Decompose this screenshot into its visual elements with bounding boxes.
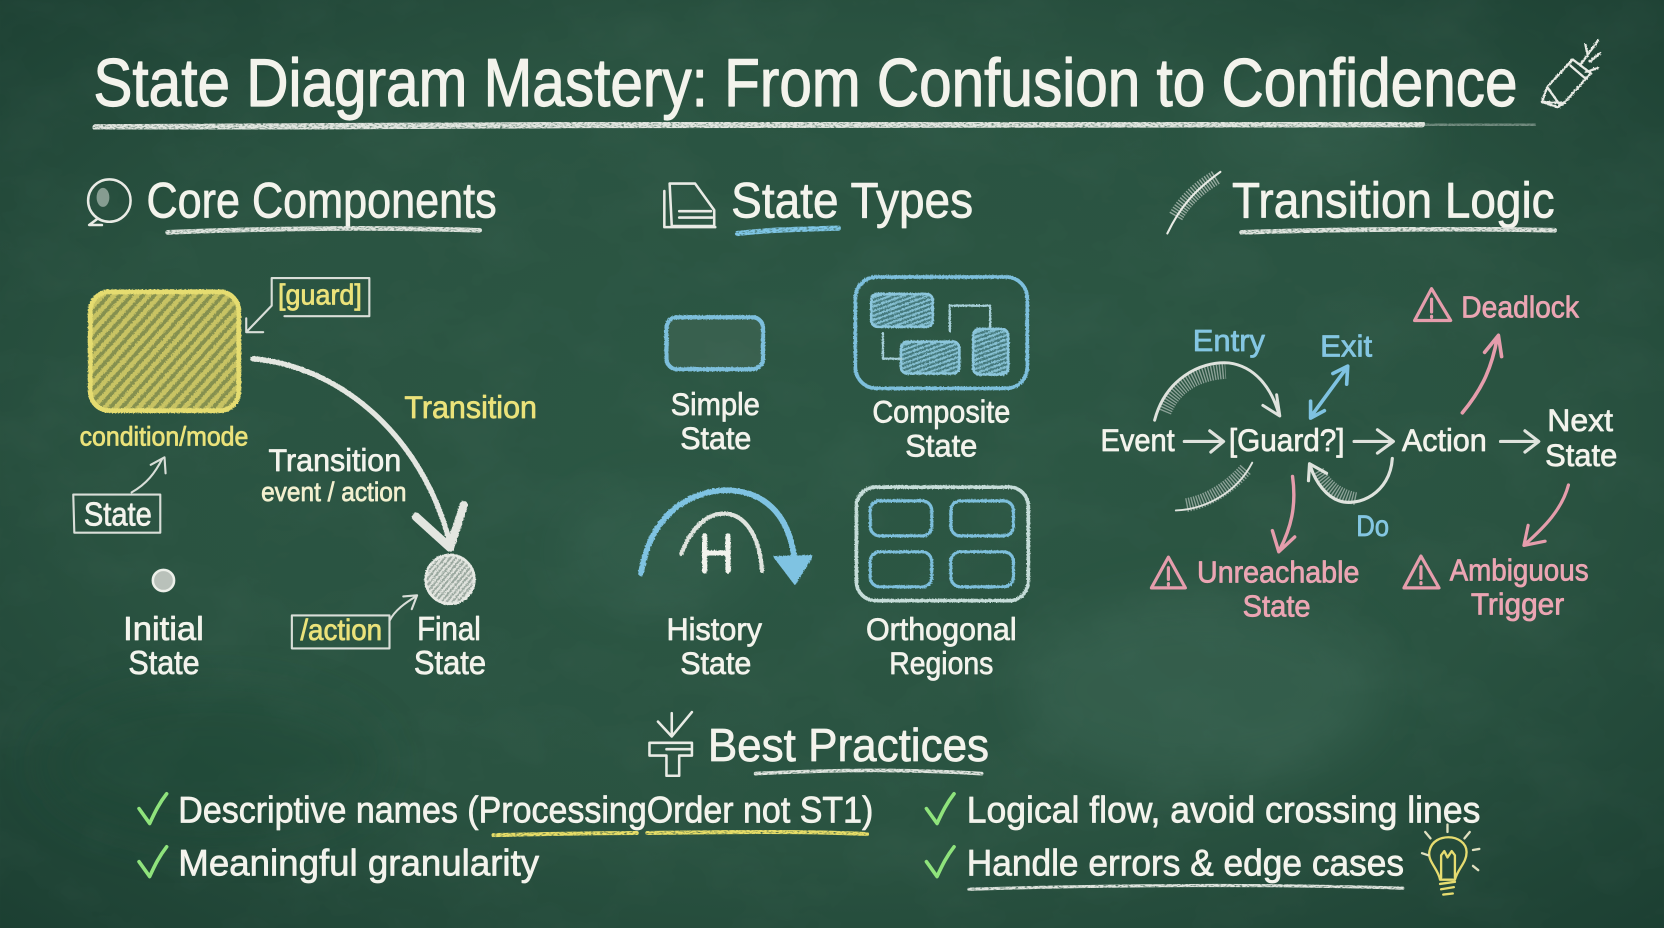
heading: best practices bbox=[649, 712, 989, 776]
do loop with feather bbox=[1308, 458, 1392, 543]
callout: guard bbox=[246, 278, 369, 332]
warning: ambiguous trigger: Trigger bbox=[1471, 586, 1564, 621]
flow: event guard action next state: [Guard?] bbox=[1229, 422, 1345, 458]
item: descriptive names: Descriptive names (ProcessingOrder not ST1) bbox=[178, 788, 873, 830]
label: transition event / action bbox=[261, 442, 406, 507]
exit arrow bbox=[1311, 329, 1373, 418]
composite state: State bbox=[905, 427, 977, 463]
orthogonal regions: Regions bbox=[889, 645, 993, 681]
warning: deadlock: Deadlock bbox=[1461, 289, 1580, 324]
warning: unreachable state: State bbox=[1243, 589, 1311, 624]
heading: transition logic: Transition Logic bbox=[1232, 173, 1555, 229]
lower left feather bbox=[1176, 463, 1252, 510]
label: transition event / action: Transition bbox=[269, 442, 401, 478]
entry arrow with feather: Entry bbox=[1193, 323, 1266, 358]
heading: best practices: Best Practices bbox=[708, 719, 989, 771]
initial state: Initial bbox=[123, 610, 204, 647]
do loop with feather: Do bbox=[1356, 510, 1389, 543]
history state: State bbox=[680, 645, 751, 681]
initial state bbox=[123, 570, 204, 681]
simple state: Simple bbox=[671, 386, 760, 422]
icon: light bulb bbox=[1422, 825, 1479, 895]
item: handle errors: Handle errors & edge cases bbox=[967, 841, 1404, 883]
state box with hatching bbox=[90, 292, 239, 411]
orthogonal regions: Orthogonal bbox=[866, 611, 1017, 647]
icon: chalk pencil bbox=[1542, 40, 1600, 107]
icon: quill bbox=[1167, 172, 1220, 233]
flow: event guard action next state: Event bbox=[1100, 422, 1175, 458]
exit arrow: Exit bbox=[1320, 329, 1373, 364]
icon: stacked pages bbox=[664, 184, 715, 227]
history state bbox=[641, 490, 812, 681]
composite state bbox=[855, 277, 1027, 463]
callout: state: State bbox=[84, 495, 152, 532]
flow: event guard action next state: Next bbox=[1547, 402, 1613, 438]
heading: core components: Core Components bbox=[146, 173, 497, 229]
flow: event guard action next state: Action bbox=[1402, 422, 1487, 458]
entry arrow with feather bbox=[1155, 323, 1280, 420]
icon: magnifier bbox=[88, 179, 131, 225]
panel: core components bbox=[73, 173, 537, 681]
icon: pin with arrow bbox=[649, 712, 692, 776]
final state: Final bbox=[417, 610, 481, 647]
warning: deadlock bbox=[1415, 289, 1580, 413]
item: logical flow: Logical flow, avoid crossing lines bbox=[967, 788, 1480, 830]
callout: guard: [guard] bbox=[278, 280, 362, 312]
panel: best practices bbox=[139, 712, 1480, 895]
panel: transition logic bbox=[1100, 172, 1617, 624]
final state bbox=[414, 555, 486, 681]
label: transition event / action: event / action bbox=[261, 477, 406, 507]
callout: action: /action bbox=[300, 614, 382, 647]
history state: History bbox=[666, 611, 762, 647]
label: transition yellow: Transition bbox=[404, 389, 537, 425]
warning: unreachable state bbox=[1151, 476, 1359, 624]
callout: state bbox=[73, 457, 166, 533]
flow: event guard action next state: State bbox=[1545, 437, 1617, 473]
simple state bbox=[666, 317, 763, 456]
initial state: State bbox=[128, 644, 200, 681]
simple state: State bbox=[680, 420, 751, 456]
callout: action bbox=[292, 595, 417, 648]
label: condition/mode: condition/mode bbox=[80, 422, 248, 452]
warning: unreachable state: Unreachable bbox=[1197, 555, 1359, 590]
orthogonal regions bbox=[856, 487, 1028, 681]
panel: state types bbox=[641, 173, 1028, 681]
heading: state types bbox=[664, 173, 973, 233]
warning: ambiguous trigger: Ambiguous bbox=[1450, 552, 1589, 587]
flow: event guard action next state bbox=[1100, 402, 1617, 473]
final state: State bbox=[414, 644, 486, 681]
composite state: Composite bbox=[872, 393, 1010, 429]
transition arrow bbox=[253, 359, 464, 548]
warning: ambiguous trigger bbox=[1404, 485, 1589, 621]
item: meaningful granularity: Meaningful granularity bbox=[178, 841, 540, 883]
heading: state types: State Types bbox=[731, 173, 973, 229]
